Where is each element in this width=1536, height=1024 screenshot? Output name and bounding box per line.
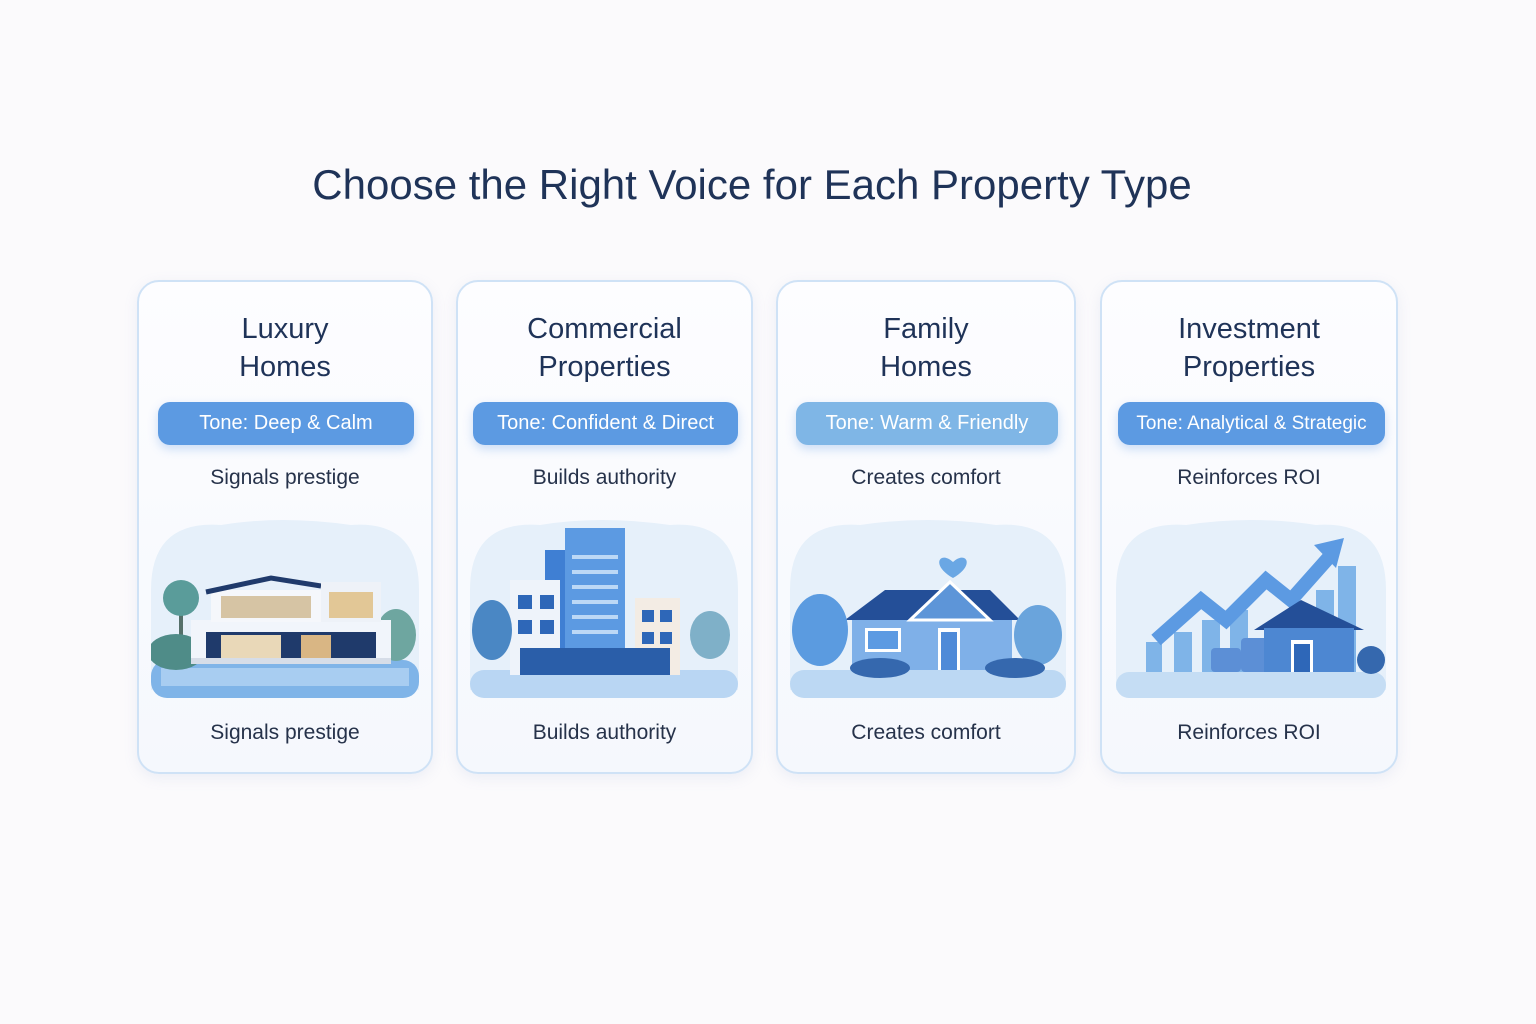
bottom caption: Creates comfort: [851, 721, 1001, 744]
illustration: family house: [790, 520, 1066, 698]
tone pill: [1118, 402, 1385, 445]
bottom caption: Builds authority: [533, 721, 676, 744]
subtitle: Signals prestige: [210, 466, 360, 489]
heading: [527, 313, 682, 383]
tone pill: Tone: Analytical & Strategic: [1136, 413, 1367, 434]
heading: Commercial: [527, 313, 682, 345]
heading: [1178, 313, 1320, 383]
heading: Investment: [1178, 313, 1320, 345]
heading: Homes: [880, 351, 972, 383]
panel: investment properties: [1100, 280, 1398, 774]
heading: Luxury: [241, 313, 329, 345]
subtitle: Reinforces ROI: [1177, 466, 1321, 489]
illustration: office buildings: [470, 520, 738, 698]
title: Choose the Right Voice for Each Property Type: [312, 161, 1192, 208]
illustration: luxury villa: [151, 520, 419, 698]
panel: luxury homes: [137, 280, 433, 774]
tone pill: Tone: Warm & Friendly: [826, 412, 1028, 434]
heading: Properties: [538, 351, 671, 383]
heading: [880, 313, 972, 383]
panel: family homes: [776, 280, 1076, 774]
tone pill: [796, 402, 1058, 445]
illustration: growth chart and house: [1116, 520, 1386, 698]
panel: commercial properties: [456, 280, 753, 774]
tone pill: [158, 402, 414, 445]
bottom caption: Reinforces ROI: [1177, 721, 1321, 744]
heading: Family: [883, 313, 969, 345]
bottom caption: Signals prestige: [210, 721, 360, 744]
heading: [239, 313, 331, 383]
subtitle: Creates comfort: [851, 466, 1001, 489]
tone pill: Tone: Deep & Calm: [199, 412, 373, 434]
subtitle: Builds authority: [533, 466, 676, 489]
tone pill: [473, 402, 738, 445]
heading: Properties: [1183, 351, 1315, 383]
tone pill: Tone: Confident & Direct: [497, 412, 714, 434]
heading: Homes: [239, 351, 331, 383]
